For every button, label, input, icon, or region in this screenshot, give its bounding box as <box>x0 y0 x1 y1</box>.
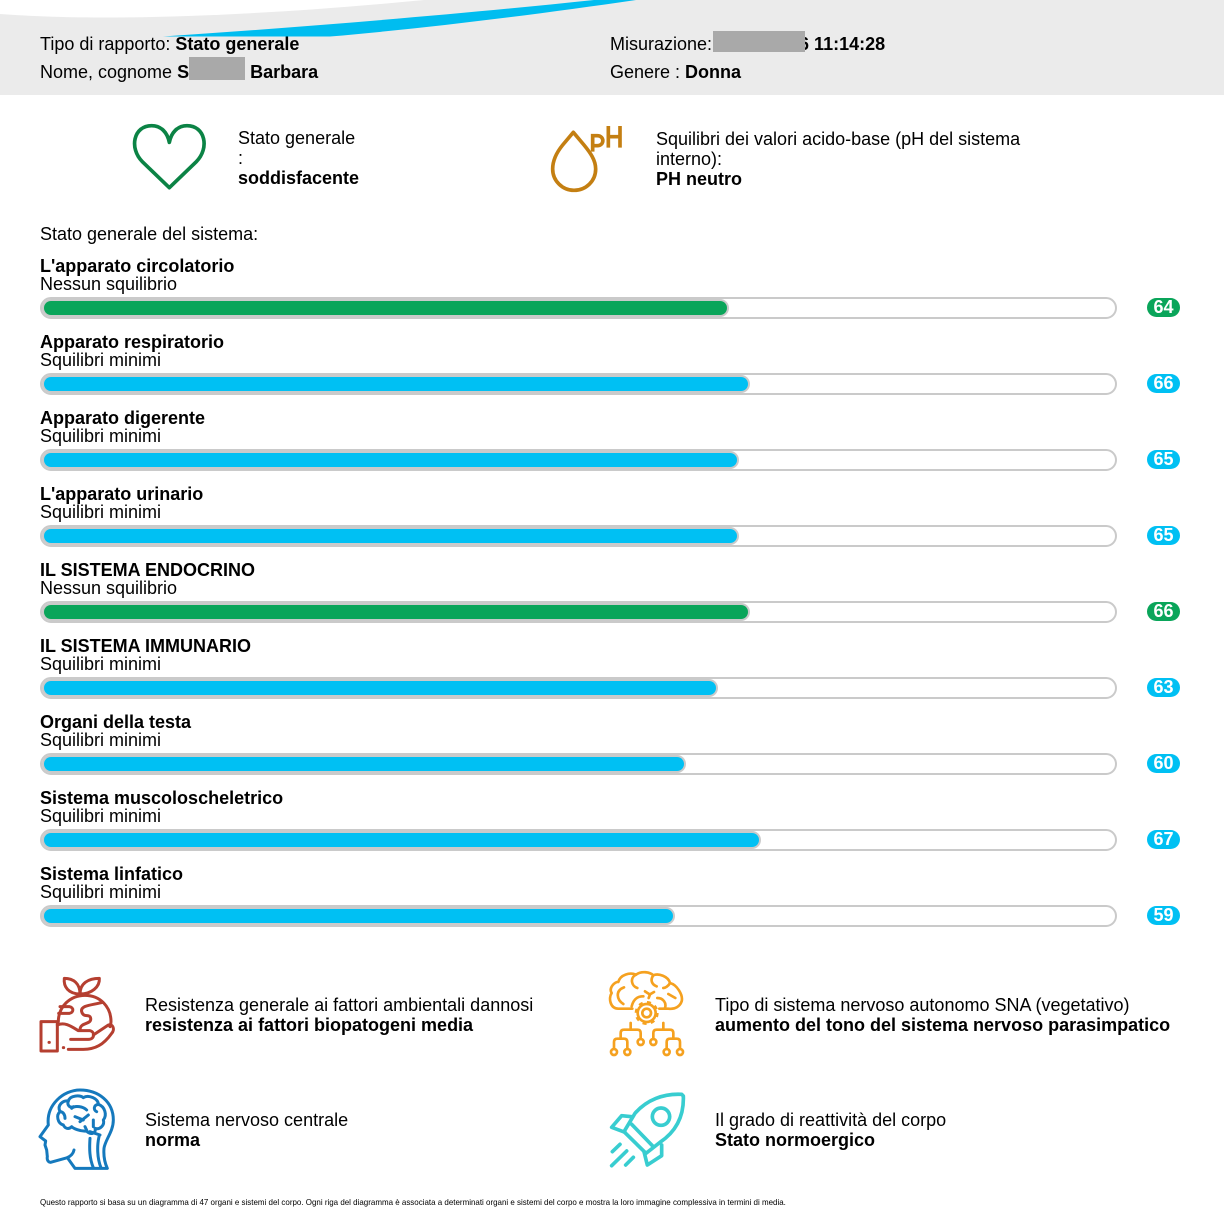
row: endocrino: Nessun squilibrio <box>40 578 177 598</box>
row: immunario <box>40 636 1180 699</box>
patient name: Nome, cognome S o Barbara <box>40 62 318 82</box>
row: immunario: 63 <box>1153 677 1174 697</box>
measurement date: Misurazione: 6 11:14:28 <box>610 34 885 54</box>
row: endocrino: 66 <box>1153 601 1174 621</box>
gender: Genere : Donna <box>610 62 741 82</box>
row: respiratorio <box>40 332 1180 395</box>
row: urinario: L'apparato urinario <box>40 484 203 504</box>
redaction: date <box>713 31 805 52</box>
acid-base text: PH neutro <box>656 169 742 189</box>
row: circolatorio <box>40 256 1180 319</box>
general state text: : <box>238 148 243 168</box>
section heading: Stato generale del sistema: <box>40 224 258 244</box>
general state text <box>238 128 359 188</box>
autonomic nervous system text: Tipo di sistema nervoso autonomo SNA (vegetativo) <box>715 995 1130 1015</box>
row: circolatorio: 64 <box>1153 297 1174 317</box>
environmental resistance text <box>145 995 533 1035</box>
general state text: Stato generale <box>238 128 355 148</box>
acid-base text <box>656 129 1020 189</box>
autonomic nervous system text <box>715 995 1170 1035</box>
central nervous system text: norma <box>145 1130 200 1150</box>
redaction: surname <box>189 57 245 80</box>
acid-base text: interno): <box>656 149 722 169</box>
autonomic nervous system text: aumento del tono del sistema nervoso parasimpatico <box>715 1015 1170 1035</box>
row: muscoloscheletrico: Sistema muscoloscheletrico <box>40 788 283 808</box>
row: muscoloscheletrico: 67 <box>1153 829 1174 849</box>
row: immunario: IL SISTEMA IMMUNARIO <box>40 636 251 656</box>
icon: rocket <box>610 1092 686 1168</box>
row: digerente: Squilibri minimi <box>40 426 161 446</box>
row: urinario <box>40 484 1180 547</box>
row: testa <box>40 712 1180 775</box>
environmental resistance text: Resistenza generale ai fattori ambientali dannosi <box>145 995 533 1015</box>
icon: heart <box>132 124 206 190</box>
report type: Tipo di rapporto: Stato generale <box>40 34 299 54</box>
central nervous system text: Sistema nervoso centrale <box>145 1110 348 1130</box>
central nervous system text <box>145 1110 348 1150</box>
row: endocrino: IL SISTEMA ENDOCRINO <box>40 560 255 580</box>
row: testa: Organi della testa <box>40 712 191 732</box>
header swoosh <box>0 0 636 36</box>
row: endocrino <box>40 560 1180 623</box>
general state text: soddisfacente <box>238 168 359 188</box>
row: testa: 60 <box>1153 753 1174 773</box>
body reactivity text <box>715 1110 946 1150</box>
row: urinario: Squilibri minimi <box>40 502 161 522</box>
icon: brain with gear and network <box>608 970 684 1056</box>
row: linfatico <box>40 864 1180 927</box>
icon: pH drop <box>550 126 622 192</box>
row: digerente: Apparato digerente <box>40 408 205 428</box>
acid-base text: Squilibri dei valori acido-base (pH del sistema <box>656 129 1020 149</box>
row: circolatorio: Nessun squilibrio <box>40 274 177 294</box>
row: linfatico: 59 <box>1153 905 1174 925</box>
icon: hand holding planet <box>40 976 115 1052</box>
row: testa: Squilibri minimi <box>40 730 161 750</box>
row: respiratorio: 66 <box>1153 373 1174 393</box>
environmental resistance text: resistenza ai fattori biopatogeni media <box>145 1015 473 1035</box>
row: respiratorio: Squilibri minimi <box>40 350 161 370</box>
row: muscoloscheletrico: Squilibri minimi <box>40 806 161 826</box>
row: immunario: Squilibri minimi <box>40 654 161 674</box>
icon: head with brain <box>38 1088 115 1170</box>
body reactivity text: Stato normoergico <box>715 1130 875 1150</box>
row: urinario: 65 <box>1153 525 1174 545</box>
row: digerente: 65 <box>1153 449 1174 469</box>
body reactivity text: Il grado di reattività del corpo <box>715 1110 946 1130</box>
row: linfatico: Squilibri minimi <box>40 882 161 902</box>
row: circolatorio: L'apparato circolatorio <box>40 256 234 276</box>
row: muscoloscheletrico <box>40 788 1180 851</box>
row: digerente <box>40 408 1180 471</box>
row: respiratorio: Apparato respiratorio <box>40 332 224 352</box>
header band <box>0 0 1224 95</box>
footnote: Questo rapporto si basa su un diagramma di 47 organi e sistemi del corpo. Ogni riga del diagramma è associata a determinati organi e sistemi del corpo e mostra la loro immagine complessiva in termini di media. <box>40 1198 786 1207</box>
row: linfatico: Sistema linfatico <box>40 864 183 884</box>
